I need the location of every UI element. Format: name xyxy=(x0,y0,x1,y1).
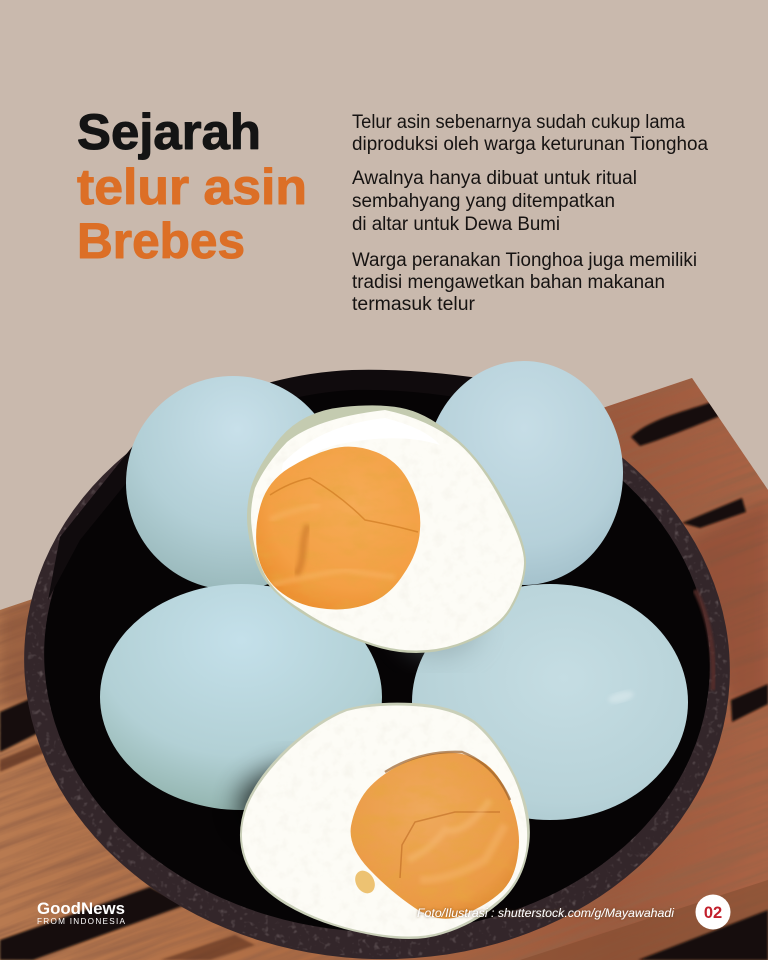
paragraph 3: termasuk telur xyxy=(352,294,476,315)
paragraph 1 xyxy=(352,112,708,155)
paragraph 1: diproduksi oleh warga keturunan Tionghoa xyxy=(352,134,708,155)
paragraph 3: Warga peranakan Tionghoa juga memiliki xyxy=(352,250,697,271)
logo: GoodNews from Indonesia: GoodNews xyxy=(37,900,125,918)
egg: top left whole xyxy=(126,376,340,590)
halved egg: lower xyxy=(240,703,530,939)
title xyxy=(77,104,307,269)
bowl xyxy=(9,353,745,960)
title: Sejarah xyxy=(77,104,261,160)
title: Brebes xyxy=(77,213,245,269)
paragraph 3 xyxy=(352,250,697,315)
egg: middle right whole xyxy=(400,584,688,820)
yolk crumb xyxy=(351,867,379,897)
wooden table photo background xyxy=(0,378,768,960)
egg: middle left whole xyxy=(100,584,400,845)
page number badge xyxy=(696,894,730,930)
paragraph 3: tradisi mengawetkan bahan makanan xyxy=(352,272,665,293)
yolk xyxy=(256,447,420,609)
paragraph 2: di altar untuk Dewa Bumi xyxy=(352,214,560,235)
photo credit: Foto/Ilustrasi : shutterstock.com/g/Mayawahadi xyxy=(417,906,674,920)
halved egg: upper xyxy=(247,405,526,653)
paragraph 2: Awalnya hanya dibuat untuk ritual xyxy=(352,168,637,189)
logo: GoodNews from Indonesia: FROM INDONESIA xyxy=(37,917,126,926)
page number badge: 02 xyxy=(704,904,722,922)
yolk xyxy=(351,752,519,919)
paragraph 2 xyxy=(352,168,637,235)
paragraph 1: Telur asin sebenarnya sudah cukup lama xyxy=(352,112,685,133)
paragraph 2: sembahyang yang ditempatkan xyxy=(352,191,615,212)
title: telur asin xyxy=(77,159,307,215)
logo: GoodNews from Indonesia xyxy=(37,900,126,926)
egg: top right whole xyxy=(425,361,623,585)
